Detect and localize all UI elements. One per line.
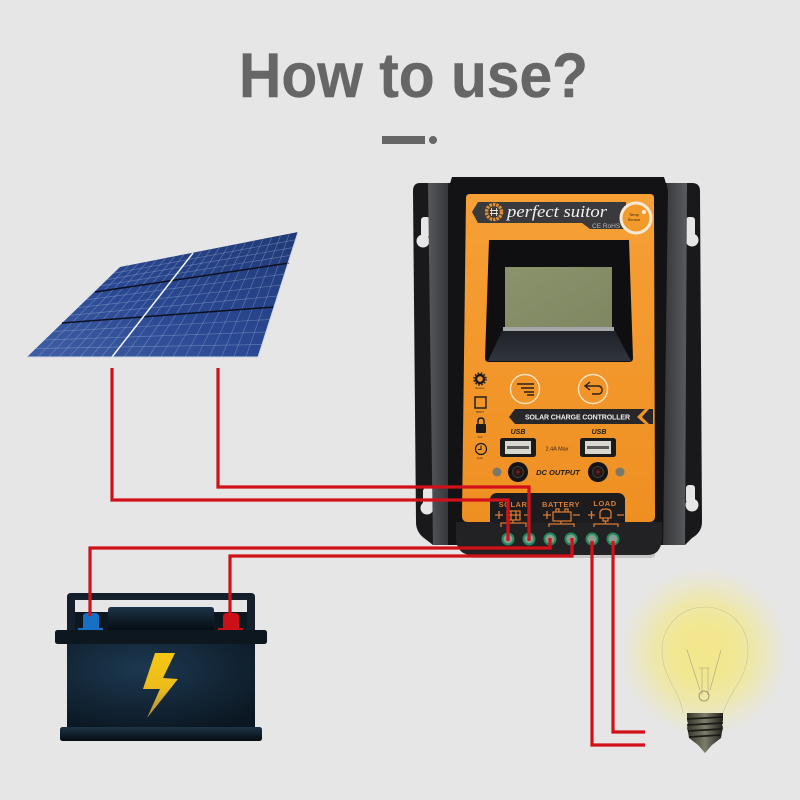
wire: solar negative (218, 368, 529, 541)
wire: battery negative (90, 538, 550, 616)
title: How to use? (239, 41, 588, 111)
light bulb (620, 568, 788, 753)
USB ports: USB (592, 429, 606, 436)
status icons: MPPT (476, 410, 484, 414)
screw terminals (502, 534, 618, 544)
terminal labels: BATTERY (542, 500, 580, 509)
terminal labels (499, 499, 617, 509)
battery top block (108, 607, 214, 630)
bulb glow (620, 568, 788, 736)
terminal labels: SOLAR (499, 500, 527, 509)
temp sensor badge (621, 203, 651, 233)
charge controller (413, 177, 702, 558)
temp sensor badge: Temp (629, 212, 640, 217)
wire: load one (592, 541, 645, 745)
back button (578, 374, 608, 404)
status icons: Auto (477, 456, 483, 460)
bulb glass (662, 607, 748, 713)
icon: lock (476, 418, 486, 433)
status icons: Full (478, 435, 483, 439)
USB ports (500, 429, 616, 457)
icon: clock (476, 444, 486, 454)
battery body (67, 644, 255, 727)
LCD screen (505, 267, 612, 327)
brand banner (472, 202, 626, 230)
menu button (510, 374, 540, 404)
main body (448, 177, 668, 545)
USB ports: USB (511, 429, 525, 436)
battery base (60, 727, 262, 741)
mounting plate (413, 183, 702, 545)
icon: sun logo (486, 204, 502, 220)
status icons: Secure (475, 386, 485, 390)
bulb screw base (687, 713, 723, 753)
product banner: SOLAR CHARGE CONTROLLER (525, 414, 630, 422)
red wiring (90, 368, 645, 745)
brand banner: perfect suitor (506, 202, 607, 221)
icon: lightning bolt (143, 653, 178, 718)
terminal labels: LOAD (593, 499, 617, 508)
status icons (474, 373, 486, 460)
battery lid (55, 630, 267, 644)
battery handle (67, 593, 255, 630)
wire: solar positive (112, 368, 508, 541)
controller shadow (470, 552, 655, 558)
LCD housing (485, 240, 633, 362)
mounting slots (416, 217, 698, 514)
DC output jacks: DC OUTPUT (536, 468, 581, 477)
battery (55, 593, 267, 741)
orange faceplate (462, 194, 655, 522)
brand banner: CE RoHS (592, 223, 621, 230)
side rails (428, 183, 687, 545)
product banner (509, 409, 653, 424)
wire: load two (613, 541, 645, 732)
temp sensor badge: Sensor (628, 217, 641, 222)
wire: battery positive (230, 538, 572, 616)
terminal block recess (490, 493, 625, 523)
icon: square (475, 397, 486, 408)
title underline dash and dot (382, 136, 437, 144)
DC output jacks (492, 462, 624, 482)
bulb filament (687, 650, 721, 695)
USB ports: 2.4A Max (546, 446, 569, 452)
terminal block (456, 522, 662, 555)
icon: gear (474, 373, 486, 385)
positive terminal (218, 613, 243, 630)
terminal symbols (495, 509, 624, 527)
solar panel (27, 232, 298, 357)
negative terminal (78, 613, 103, 630)
